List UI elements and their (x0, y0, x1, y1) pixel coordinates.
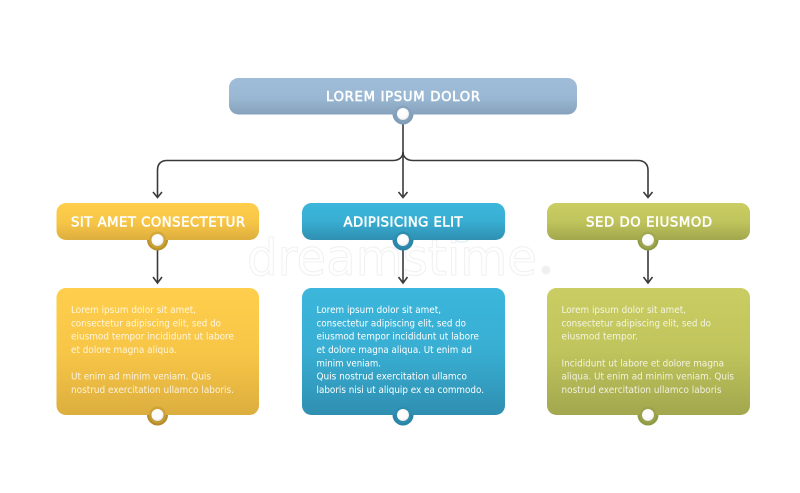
connector dot: yellow body (152, 409, 164, 421)
body text: blue (316, 305, 484, 396)
body text: blue: consectetur adipiscing elit, sed do (316, 318, 466, 329)
body text: green: Incididunt ut labore et dolore magna (562, 358, 724, 369)
arrow: green header to body (644, 248, 652, 283)
arrow: blue header to body (398, 248, 408, 283)
heading: green: SED DO EIUSMOD (586, 216, 712, 230)
body text: green: aliqua. Ut enim ad minim veniam. Quis (562, 372, 734, 383)
body text: yellow: et dolore magna aliqua. (71, 345, 177, 356)
header: blue (302, 203, 505, 250)
panel: blue body (302, 288, 505, 426)
body text: blue: laboris nisi ut aliquip ex ea commodo. (316, 385, 484, 396)
panel: yellow body (56, 288, 259, 426)
body text: blue: et dolore magna aliqua. Ut enim ad (316, 345, 472, 356)
body text: blue: Lorem ipsum dolor sit amet, (316, 305, 441, 316)
watermark: dreamstime (247, 229, 537, 287)
heading: top: LOREM IPSUM DOLOR (326, 90, 480, 105)
connector dot: green header (642, 234, 654, 246)
panel: green body (547, 288, 750, 426)
top node (229, 78, 577, 124)
body text: yellow: consectetur adipiscing elit, sed do (71, 318, 221, 329)
body text: green (562, 305, 734, 396)
connector dot: blue header (397, 234, 409, 246)
connector lines: top split (153, 122, 652, 198)
body text: yellow: Lorem ipsum dolor sit amet, (71, 305, 196, 316)
body text: yellow: Ut enim ad minim veniam. Quis (71, 372, 211, 383)
body text: green: nostrud exercitation ullamco laboris (562, 385, 722, 396)
body text: green: consectetur adipiscing elit, sed do (562, 318, 711, 329)
connector dot: yellow header (152, 234, 164, 246)
heading: yellow: SIT AMET CONSECTETUR (71, 216, 245, 230)
body text: blue: minim veniam. (316, 358, 381, 369)
header: green (547, 203, 750, 250)
connector dot: blue body (397, 409, 409, 421)
body text: blue: eiusmod tempor incididunt ut labore (316, 332, 479, 343)
body text: yellow: eiusmod tempor incididunt ut labore (71, 332, 234, 343)
header: yellow (56, 203, 259, 250)
body text: green: eiusmod tempor. (562, 332, 638, 343)
body text: blue: Quis nostrud exercitation ullamco (316, 372, 467, 383)
heading: blue: ADIPISICING ELIT (344, 216, 463, 230)
connector dot: top (397, 108, 409, 120)
body text: green: Lorem ipsum dolor sit amet, (562, 305, 686, 316)
connector dot: green body (642, 409, 654, 421)
body text: yellow: nostrud exercitation ullamco laboris. (71, 385, 234, 396)
body text: yellow (71, 305, 234, 396)
arrow: yellow header to body (153, 248, 162, 283)
